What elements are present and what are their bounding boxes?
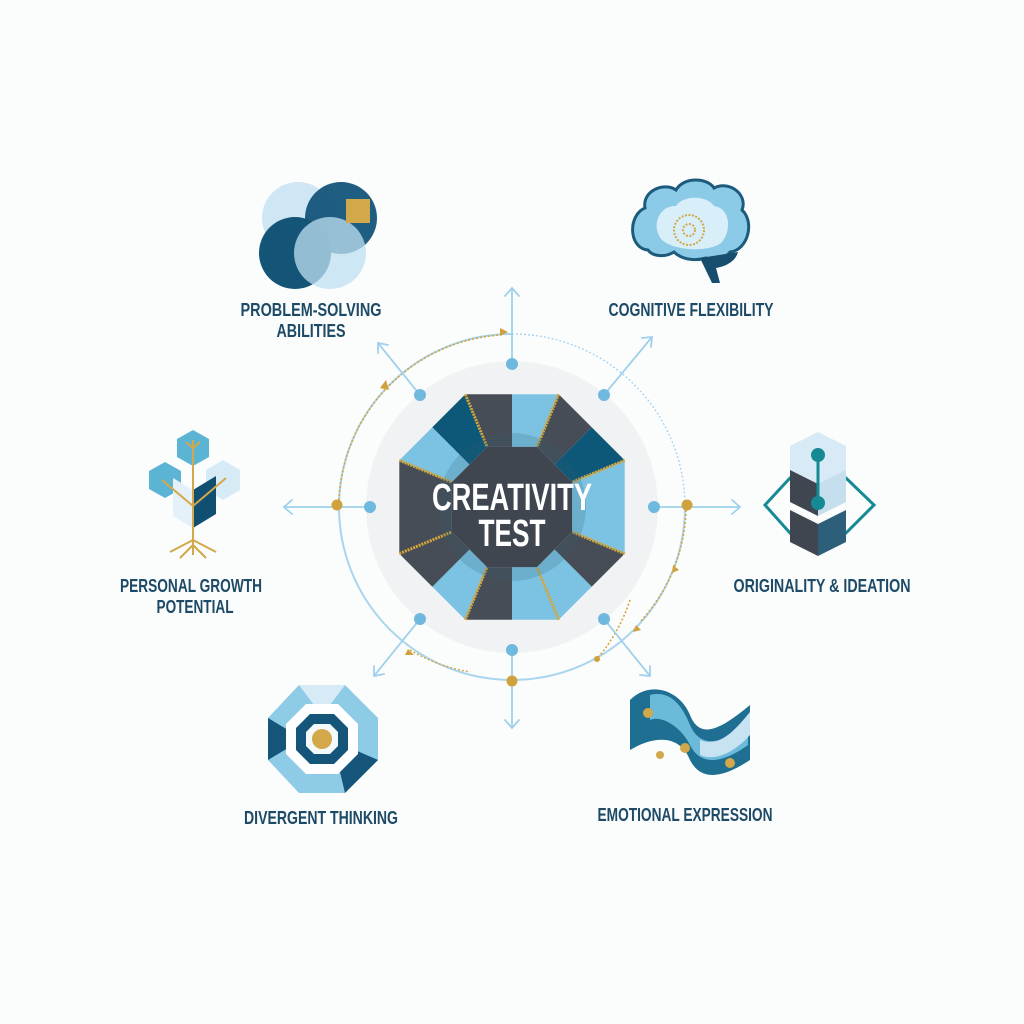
panel: originality [734,432,910,596]
icon: overlapping circles [259,182,377,289]
center title: CREATIVITY [432,477,592,519]
panel: personal growth [120,430,262,617]
panel: cognitive flexibility [608,180,774,320]
dots [364,358,660,656]
label: COGNITIVE FLEXIBILITY [608,300,774,320]
background disc [366,361,658,653]
panel: divergent thinking [244,685,398,828]
label: DIVERGENT THINKING [244,808,398,828]
label: POTENTIAL [156,597,234,617]
icon: octagon rings [268,685,378,793]
central diagram [284,288,740,728]
label [240,300,382,341]
outer ring [339,334,686,680]
label: PERSONAL GROWTH [120,576,262,596]
label [120,576,262,617]
panel: emotional expression [598,689,772,825]
arrows [284,288,740,728]
icon: hexagon and blocks [765,432,874,556]
icon: brain [633,180,749,283]
label: EMOTIONAL EXPRESSION [598,805,772,825]
label: ABILITIES [276,321,346,341]
center title [432,477,592,555]
icon: plant with hexagons [149,430,240,558]
icon: wave ribbon [630,689,750,775]
panel: problem-solving [240,182,382,341]
label: PROBLEM-SOLVING [240,300,382,320]
center title: TEST [478,513,546,555]
label: ORIGINALITY & IDEATION [734,576,910,596]
octagon badge [399,394,625,620]
